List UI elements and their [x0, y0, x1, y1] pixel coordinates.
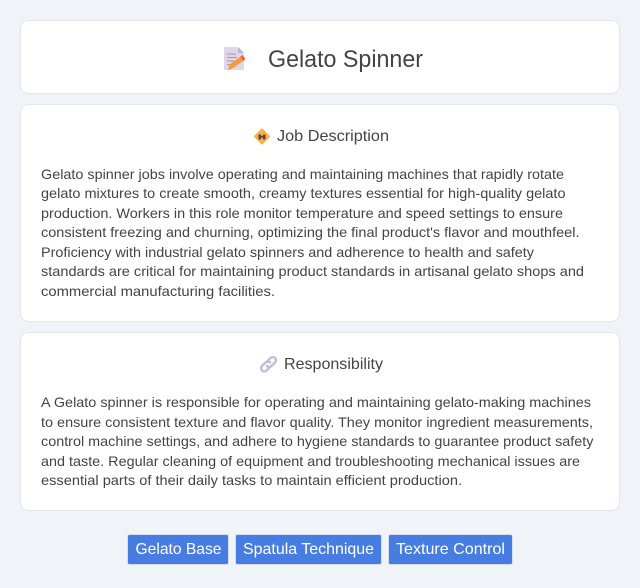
job description text: Proficiency with industrial gelato spinners and adherence to health and safety [41, 244, 534, 260]
job description text [41, 166, 584, 299]
tag: Spatula Technique [236, 534, 382, 564]
panel: responsibility [20, 332, 620, 510]
tag: Gelato Base [128, 534, 228, 564]
tag: Spatula Technique: Spatula Technique [243, 541, 374, 558]
icon: document with pencil [224, 47, 246, 70]
responsibility text: control machine settings, and adhere to hygiene standards to guarantee product safety [41, 433, 594, 449]
panel: job description [20, 104, 620, 322]
responsibility text: and taste. Regular cleaning of equipment and troubleshooting mechanical issues are [41, 453, 580, 469]
tag: Gelato Base: Gelato Base [136, 541, 222, 558]
heading text: Responsibility [284, 356, 383, 373]
job description text: consistent freezing and churning, optimizing the final product's flavor and mouthfeel. [41, 224, 580, 240]
icon: orange diamond [255, 130, 269, 144]
responsibility text: A Gelato spinner is responsible for operating and maintaining gelato-making machines [41, 394, 591, 410]
responsibility text [41, 394, 594, 488]
responsibility text: to ensure consistent texture and flavor quality. They monitor ingredient measurements, [41, 414, 593, 430]
panel: title [20, 20, 620, 94]
heading: responsibility [261, 356, 383, 373]
job description text: standards are critical for maintaining product standards in artisanal gelato shops and [41, 263, 584, 279]
job description text: commercial manufacturing facilities. [41, 283, 275, 299]
job description text: Gelato spinner jobs involve operating and maintaining machines that rapidly rotate [41, 166, 564, 182]
job description text: gelato mixtures to create smooth, creamy textures essential for high-quality gelato [41, 185, 566, 201]
icon: chain link [261, 357, 276, 371]
title text: Gelato Spinner [268, 46, 423, 73]
tag: Texture Control [388, 534, 512, 564]
tag: Texture Control: Texture Control [396, 541, 505, 558]
heading: job description [255, 128, 389, 145]
heading text: Job Description [277, 128, 389, 145]
responsibility text: essential parts of their daily tasks to maintain efficient production. [41, 472, 462, 488]
job description text: production. Workers in this role monitor temperature and speed settings to ensure [41, 205, 563, 221]
